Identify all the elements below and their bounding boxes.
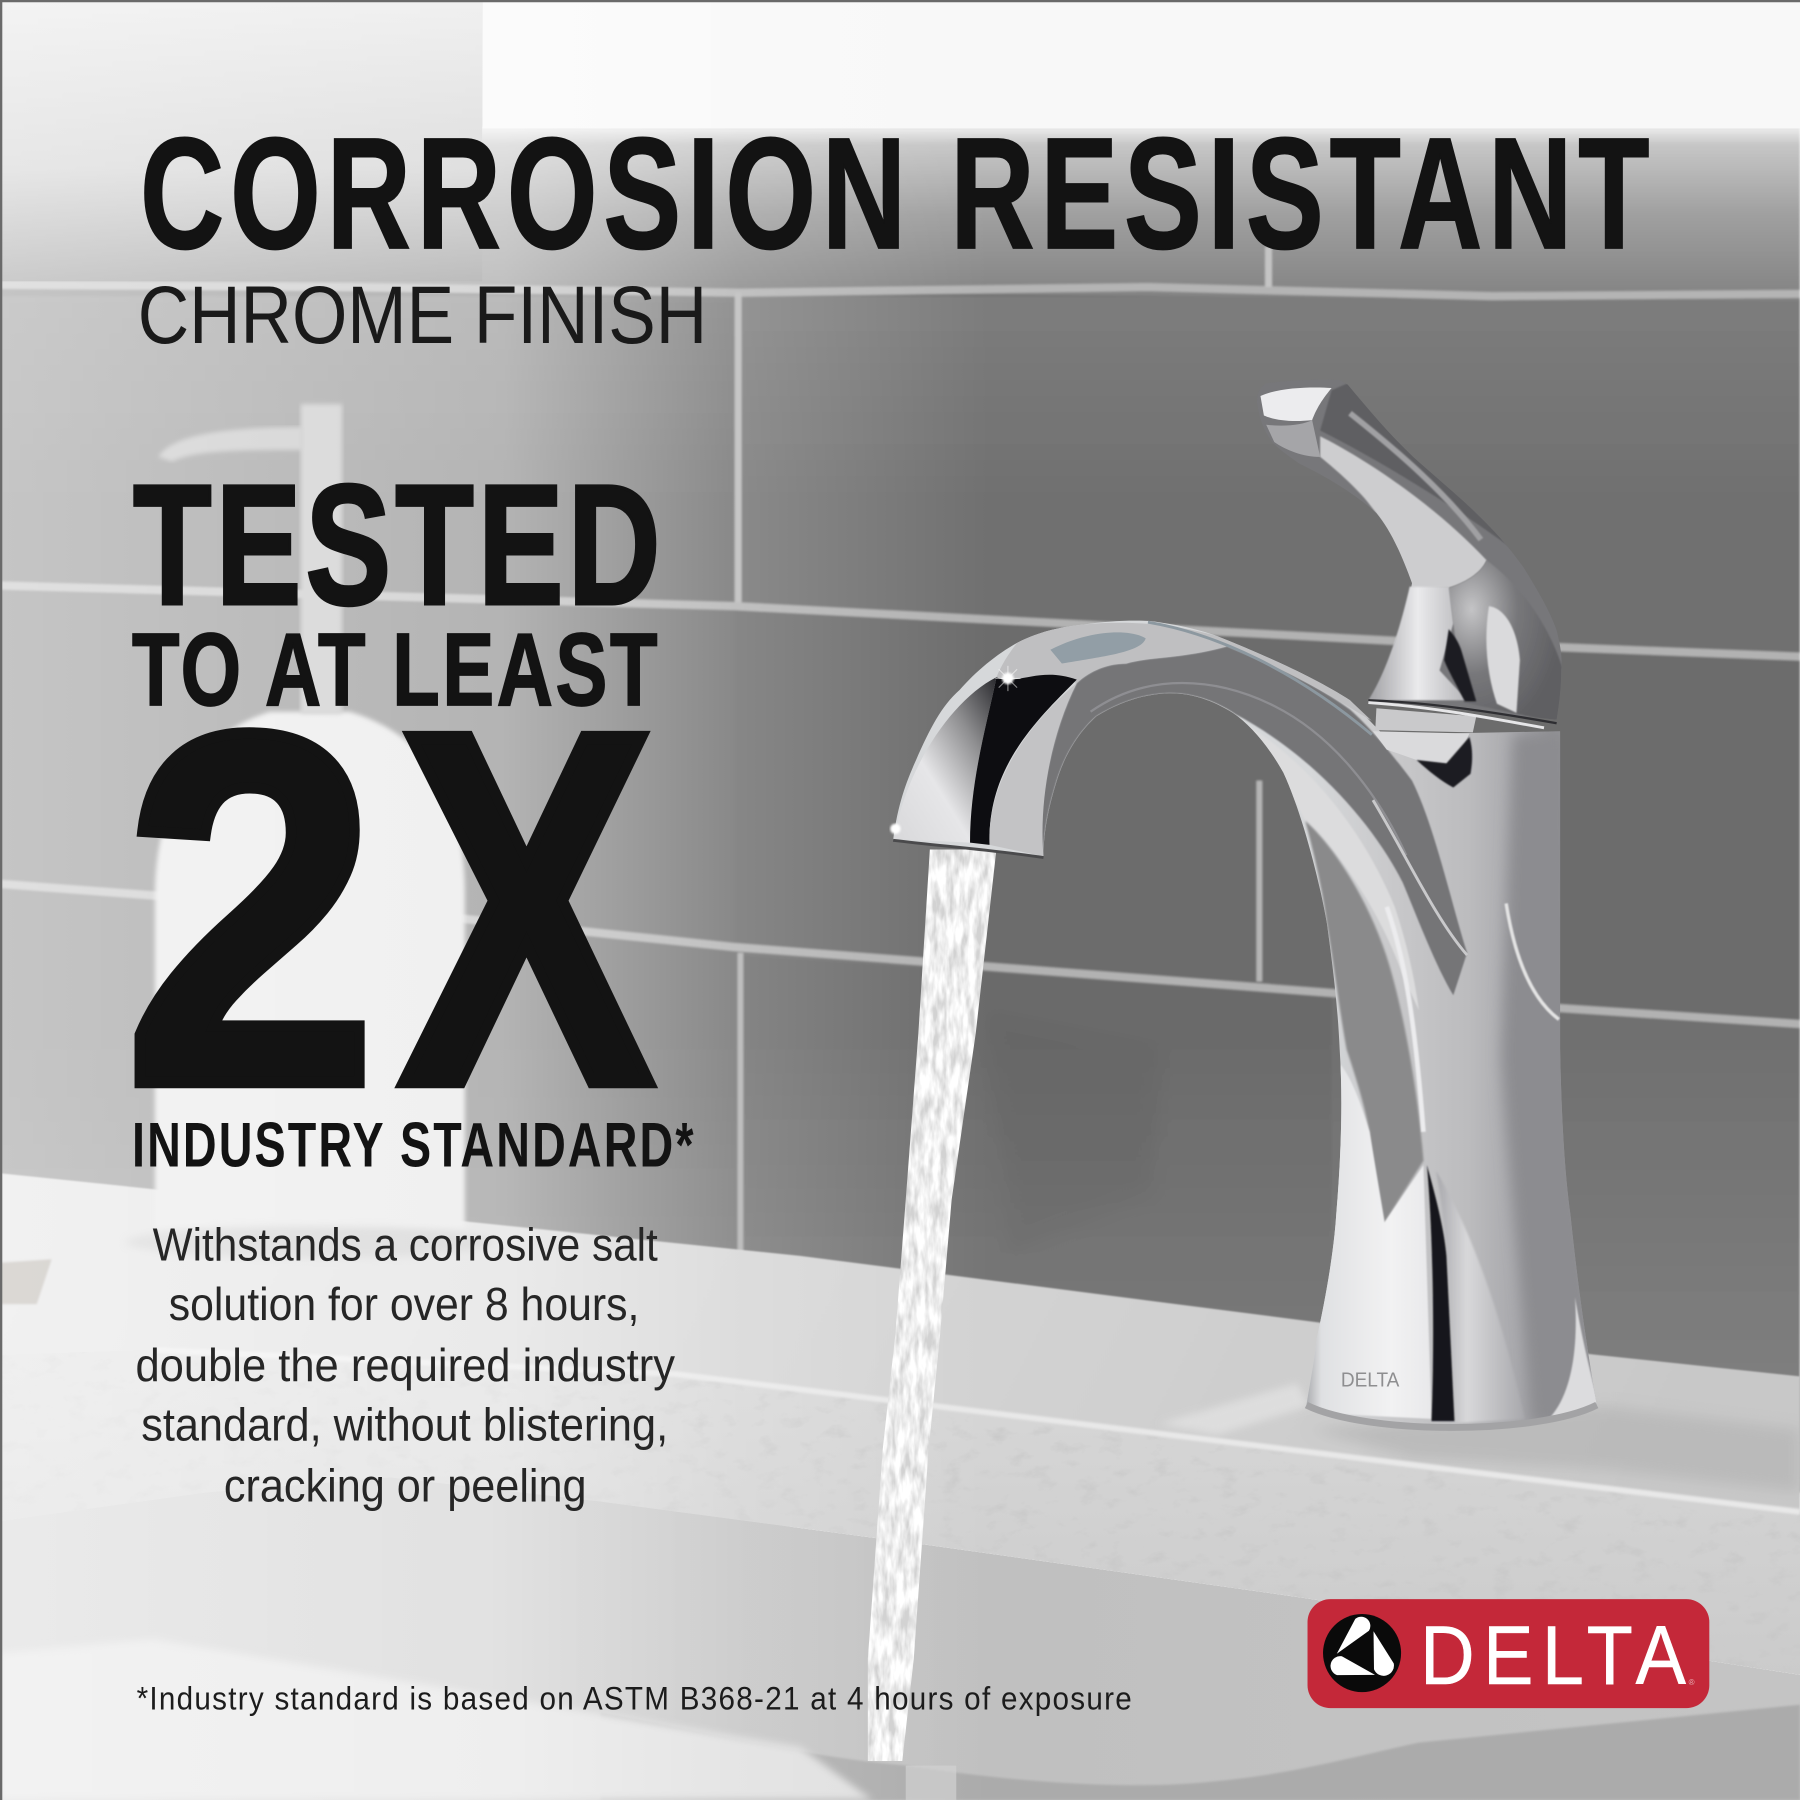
- counter edge highlight: [153, 1350, 1800, 1512]
- black reflection stripe: [1427, 1165, 1454, 1421]
- arch dark ribbon: [1039, 646, 1467, 995]
- spout top light strip: [996, 623, 1372, 721]
- subtitle: chrome finish: CHROME FINISH: [138, 270, 707, 361]
- headline: tested: TESTED: [133, 450, 665, 641]
- handle lever: [1257, 380, 1562, 720]
- faucet body silhouette: [893, 621, 1597, 1428]
- spout nose bright: [894, 677, 996, 843]
- counter top: [0, 1173, 1800, 1527]
- neck black streak: [1444, 629, 1476, 701]
- logo wordmark: DELTA: [1420, 1608, 1694, 1702]
- aerator rim: [893, 840, 1043, 858]
- spout outer rim: [1148, 622, 1372, 735]
- description paragraph: Withstands a corrosive salt: [153, 1218, 658, 1270]
- counter front edge: [0, 1350, 1800, 1675]
- faucet shadow on counter: [1309, 1406, 1800, 1492]
- gray reflection patch on body: [1305, 821, 1423, 1223]
- base bright area: [1297, 1056, 1432, 1419]
- lever dome: [1449, 560, 1564, 723]
- base ring: [1306, 1405, 1597, 1427]
- logo: Delta: [1308, 1599, 1709, 1708]
- big number: 2X: X: [401, 629, 654, 1187]
- handle neck: [1368, 587, 1467, 700]
- icon: delta triangle mark: [1323, 1614, 1401, 1692]
- handle flange: [1368, 700, 1557, 723]
- spout gray strip: [989, 683, 1077, 856]
- description paragraph: solution for over 8 hours,: [169, 1278, 639, 1330]
- lever lit band: [1320, 436, 1487, 588]
- sink basin: [0, 1477, 1800, 1800]
- base right lit area: [1436, 1174, 1516, 1423]
- upper left pale tile columns: [0, 0, 482, 281]
- sink highlight: [0, 1639, 872, 1800]
- lever tip highlight: [1260, 387, 1332, 421]
- description paragraph: [135, 1218, 675, 1512]
- top window: [482, 0, 1800, 129]
- footnote: *Industry standard is based on ASTM B368-21 at 4 hours of exposure: [137, 1680, 1133, 1716]
- sink inner shade: [600, 1705, 1800, 1800]
- white strip beside patch: [1387, 907, 1423, 1132]
- spout top reflection: [1050, 632, 1146, 664]
- lever reflections clipped to silhouette: [1320, 382, 1564, 723]
- spout black wedge: [970, 675, 1077, 845]
- small object on counter: [0, 1259, 52, 1304]
- lever top dark strip: [1320, 384, 1504, 544]
- description paragraph: standard, without blistering,: [141, 1399, 668, 1451]
- big number: 2X: 2: [124, 631, 378, 1190]
- right column shade: [1502, 731, 1601, 1423]
- headline: industry standard: INDUSTRY STANDARD*: [132, 1110, 696, 1180]
- big number: 2X: [124, 629, 654, 1190]
- ribbon contour lines: [1091, 683, 1406, 855]
- water stream: [868, 849, 996, 1800]
- registered mark: ®: [1689, 1678, 1695, 1687]
- grout reflection curve: [1506, 903, 1559, 1019]
- soap bottle: [126, 404, 494, 1258]
- lever under tip: [1266, 420, 1320, 457]
- base right rim light: [1550, 1299, 1596, 1416]
- neck dark spot: [1417, 737, 1472, 788]
- neck collar: [1375, 708, 1476, 732]
- description paragraph: cracking or peeling: [224, 1460, 587, 1512]
- faucet: [890, 380, 1601, 1428]
- sparkle highlights: [890, 666, 1021, 834]
- arch inner lit band: [1199, 697, 1418, 1008]
- description paragraph: double the required industry: [135, 1339, 675, 1391]
- dome lit panel: [1486, 606, 1520, 713]
- headline: to at least: TO AT LEAST: [132, 611, 660, 727]
- body reflections clipped to silhouette: [1039, 646, 1601, 1423]
- faucet brand mark: DELTA: [1341, 1369, 1400, 1392]
- lever streak: [1350, 413, 1481, 540]
